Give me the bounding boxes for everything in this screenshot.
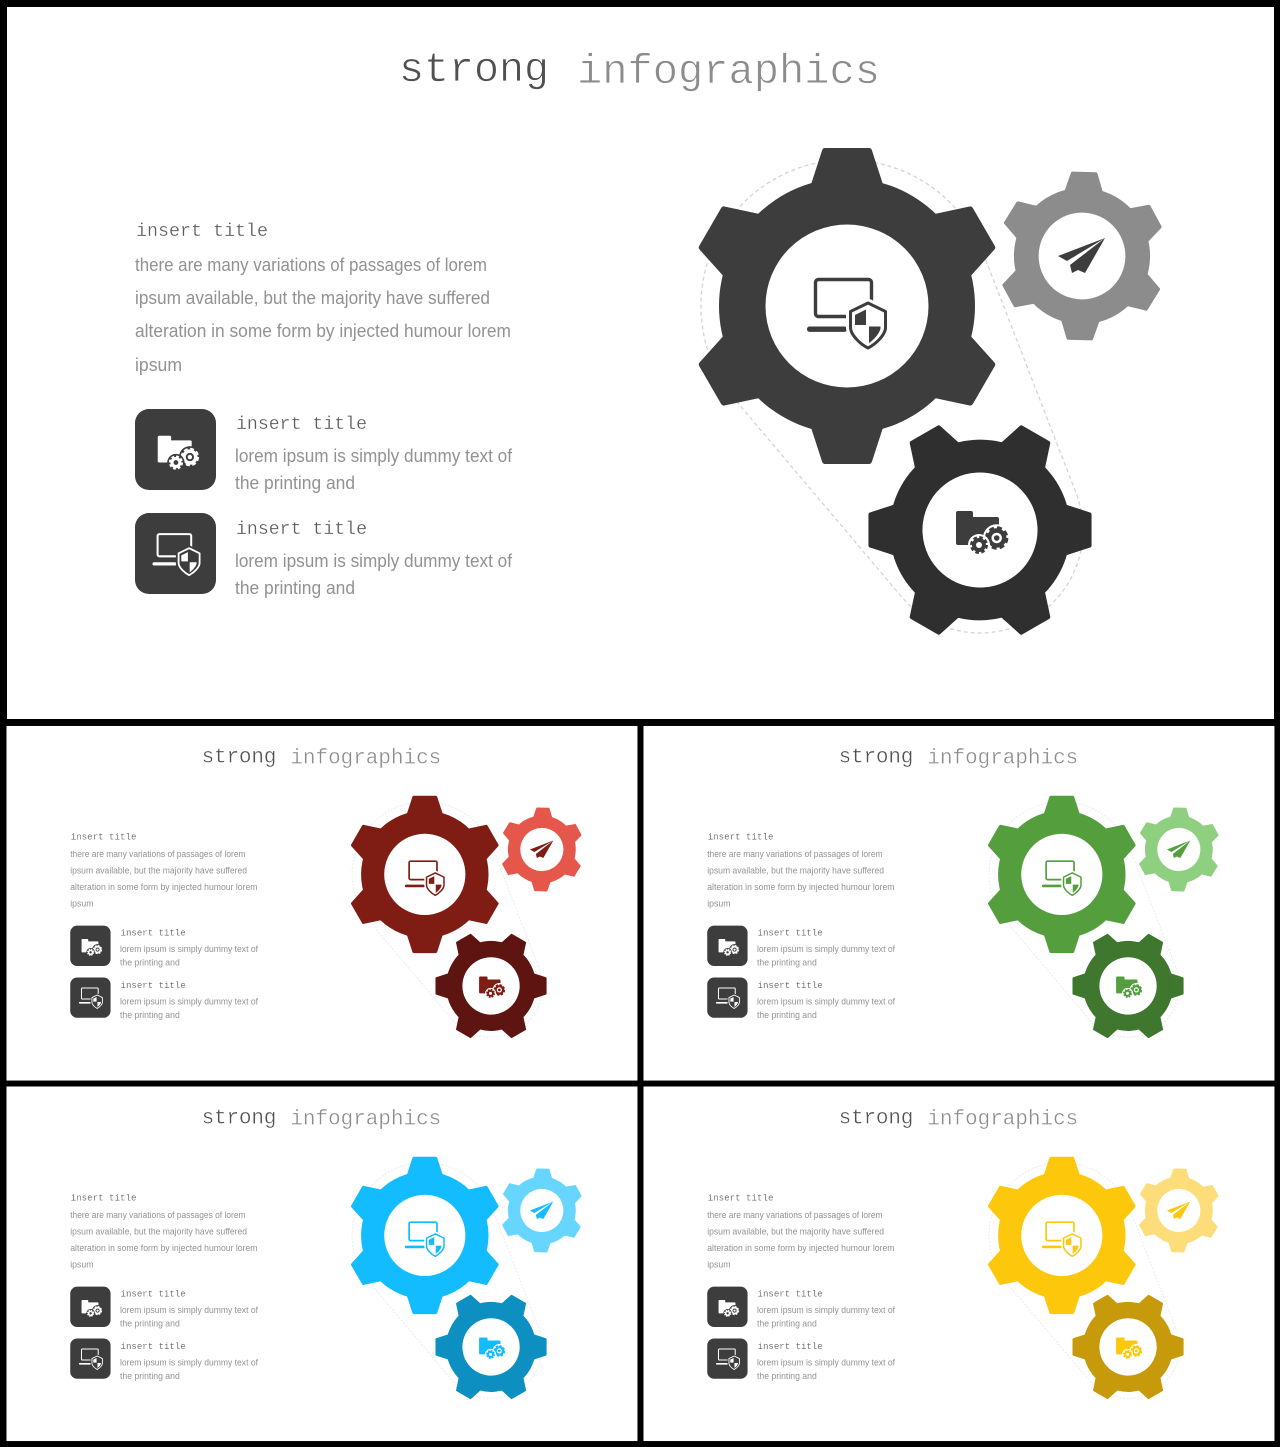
title: infographics bbox=[290, 747, 441, 770]
icon tile: laptop with shield bbox=[70, 977, 111, 1018]
text block: item one: lorem ipsum is simply dummy text of bbox=[235, 446, 513, 466]
text block: intro paragraph: ipsum available, but the majority have suffered bbox=[707, 1226, 884, 1236]
gear: large with laptop icon bbox=[349, 1158, 500, 1313]
text block: intro paragraph: alteration in some form by injected humour lorem bbox=[707, 882, 894, 892]
title bbox=[399, 46, 880, 96]
text block: intro paragraph: alteration in some form by injected humour lorem bbox=[707, 1243, 894, 1253]
text block: intro paragraph: there are many variations of passages of lorem bbox=[70, 849, 246, 859]
text block: intro paragraph: ipsum available, but the majority have suffered bbox=[70, 1226, 247, 1236]
gear: light with paper plane icon bbox=[501, 1168, 583, 1253]
text block: item one: lorem ipsum is simply dummy text of bbox=[120, 1305, 258, 1315]
panel: green version bbox=[643, 726, 1274, 1081]
text block: item two: the printing and bbox=[235, 578, 355, 598]
gear: large with laptop icon bbox=[696, 151, 998, 461]
icon tile: laptop with shield bbox=[135, 513, 216, 594]
text block: item one: the printing and bbox=[120, 1319, 180, 1329]
text block: item one bbox=[120, 929, 258, 968]
text block: intro paragraph: there are many variations of passages of lorem bbox=[135, 255, 487, 275]
dashed belt around gears bbox=[352, 1163, 542, 1398]
text block: intro paragraph: ipsum bbox=[135, 355, 182, 375]
gear: dark with folder icon bbox=[833, 382, 1127, 678]
text block: item two: lorem ipsum is simply dummy text of bbox=[757, 1357, 895, 1367]
icon tile: laptop with shield bbox=[707, 1338, 748, 1379]
text block: intro paragraph: ipsum available, but the majority have suffered bbox=[707, 865, 884, 875]
text block: item one: lorem ipsum is simply dummy text of bbox=[757, 944, 895, 954]
title bbox=[839, 1107, 1078, 1131]
gear: large with laptop icon bbox=[349, 797, 500, 952]
text block: intro paragraph bbox=[707, 849, 894, 909]
text block: item one: insert title bbox=[121, 1290, 186, 1300]
text block: intro paragraph: ipsum bbox=[70, 1260, 94, 1270]
heading: insert title: insert title bbox=[708, 1194, 773, 1204]
text block: intro paragraph: ipsum bbox=[70, 899, 94, 909]
title bbox=[202, 1107, 441, 1131]
text block: intro paragraph: ipsum available, but the majority have suffered bbox=[70, 865, 247, 875]
dashed belt around gears bbox=[352, 802, 542, 1037]
gear: light with paper plane icon bbox=[1138, 1168, 1220, 1253]
text block: item two bbox=[757, 981, 895, 1020]
text block: item two: insert title bbox=[121, 1342, 186, 1352]
text block: item one: insert title bbox=[236, 415, 367, 435]
text block: item one: the printing and bbox=[235, 473, 355, 493]
text block: item one: the printing and bbox=[757, 958, 817, 968]
dashed belt around gears bbox=[989, 802, 1179, 1037]
text block: item two: lorem ipsum is simply dummy text of bbox=[120, 1357, 258, 1367]
text block: intro paragraph: alteration in some form by injected humour lorem bbox=[135, 321, 511, 341]
dashed belt around gears bbox=[701, 160, 1083, 633]
panel: yellow version bbox=[643, 1086, 1274, 1441]
text block: item two bbox=[235, 520, 513, 598]
gear: light with paper plane icon bbox=[1138, 807, 1220, 892]
icon tile: folder with gears bbox=[70, 1287, 111, 1327]
gear: dark with folder icon bbox=[1055, 1273, 1201, 1421]
text block: item two bbox=[120, 981, 258, 1020]
heading: insert title: insert title bbox=[708, 833, 773, 843]
icon tile: laptop with shield bbox=[70, 1338, 111, 1379]
text block: item one: insert title bbox=[758, 1290, 823, 1300]
text block: item two: insert title bbox=[758, 981, 823, 991]
text block: intro paragraph: ipsum bbox=[707, 1260, 731, 1270]
icon tile: folder with gears bbox=[135, 409, 216, 490]
title: infographics bbox=[577, 48, 880, 96]
text block: item two: the printing and bbox=[120, 1371, 180, 1381]
gear: large with laptop icon bbox=[986, 1158, 1137, 1313]
text block: intro paragraph bbox=[70, 1210, 257, 1270]
text block: item two bbox=[120, 1342, 258, 1381]
panel: blue version bbox=[6, 1086, 637, 1441]
title: infographics bbox=[927, 747, 1078, 770]
text block: item one: insert title bbox=[758, 929, 823, 939]
text block: intro paragraph: ipsum bbox=[707, 899, 731, 909]
title: strong bbox=[399, 46, 549, 94]
dashed belt around gears bbox=[989, 1163, 1179, 1398]
icon tile: folder with gears bbox=[707, 1287, 748, 1327]
gear: dark with folder icon bbox=[418, 912, 564, 1060]
text block: item two: insert title bbox=[236, 520, 367, 540]
text block: item one: insert title bbox=[121, 929, 186, 939]
panel: red version bbox=[6, 726, 637, 1081]
title: strong bbox=[202, 746, 276, 769]
text block: item two bbox=[757, 1342, 895, 1381]
gear: dark with folder icon bbox=[418, 1273, 564, 1421]
text block: item two: lorem ipsum is simply dummy text of bbox=[757, 996, 895, 1006]
heading: insert title: insert title bbox=[136, 222, 268, 242]
text block: intro paragraph bbox=[135, 255, 511, 375]
gear: large with laptop icon bbox=[986, 797, 1137, 952]
heading: insert title: insert title bbox=[71, 1194, 136, 1204]
text block: item one: the printing and bbox=[120, 958, 180, 968]
text block: item two: insert title bbox=[758, 1342, 823, 1352]
text block: intro paragraph bbox=[70, 849, 257, 909]
text block: item one: lorem ipsum is simply dummy text of bbox=[757, 1305, 895, 1315]
gear: dark with folder icon bbox=[1055, 912, 1201, 1060]
icon tile: folder with gears bbox=[70, 926, 111, 966]
text block: item two: insert title bbox=[121, 981, 186, 991]
title: infographics bbox=[927, 1108, 1078, 1131]
title: strong bbox=[839, 1107, 913, 1130]
text block: item two: the printing and bbox=[120, 1010, 180, 1020]
text block: item one bbox=[235, 415, 513, 493]
title: strong bbox=[839, 746, 913, 769]
text block: item one: lorem ipsum is simply dummy text of bbox=[120, 944, 258, 954]
text block: item two: the printing and bbox=[757, 1010, 817, 1020]
panel: large grey version bbox=[7, 7, 1274, 719]
gear: grey with paper plane icon bbox=[999, 171, 1165, 341]
text block: intro paragraph: alteration in some form by injected humour lorem bbox=[70, 882, 257, 892]
text block: intro paragraph: ipsum available, but the majority have suffered bbox=[135, 288, 490, 308]
heading: insert title: insert title bbox=[71, 833, 136, 843]
text block: item one bbox=[757, 929, 895, 968]
gear: light with paper plane icon bbox=[501, 807, 583, 892]
text block: intro paragraph: alteration in some form by injected humour lorem bbox=[70, 1243, 257, 1253]
text block: intro paragraph bbox=[707, 1210, 894, 1270]
text block: intro paragraph: there are many variations of passages of lorem bbox=[707, 1210, 883, 1220]
title: infographics bbox=[290, 1108, 441, 1131]
text block: intro paragraph: there are many variations of passages of lorem bbox=[707, 849, 883, 859]
text block: intro paragraph: there are many variations of passages of lorem bbox=[70, 1210, 246, 1220]
title bbox=[839, 746, 1078, 770]
title: strong bbox=[202, 1107, 276, 1130]
icon tile: laptop with shield bbox=[707, 977, 748, 1018]
icon tile: folder with gears bbox=[707, 926, 748, 966]
text block: item two: lorem ipsum is simply dummy text of bbox=[235, 551, 513, 571]
text block: item one bbox=[120, 1290, 258, 1329]
text block: item two: lorem ipsum is simply dummy text of bbox=[120, 996, 258, 1006]
text block: item one bbox=[757, 1290, 895, 1329]
text block: item two: the printing and bbox=[757, 1371, 817, 1381]
text block: item one: the printing and bbox=[757, 1319, 817, 1329]
title bbox=[202, 746, 441, 770]
